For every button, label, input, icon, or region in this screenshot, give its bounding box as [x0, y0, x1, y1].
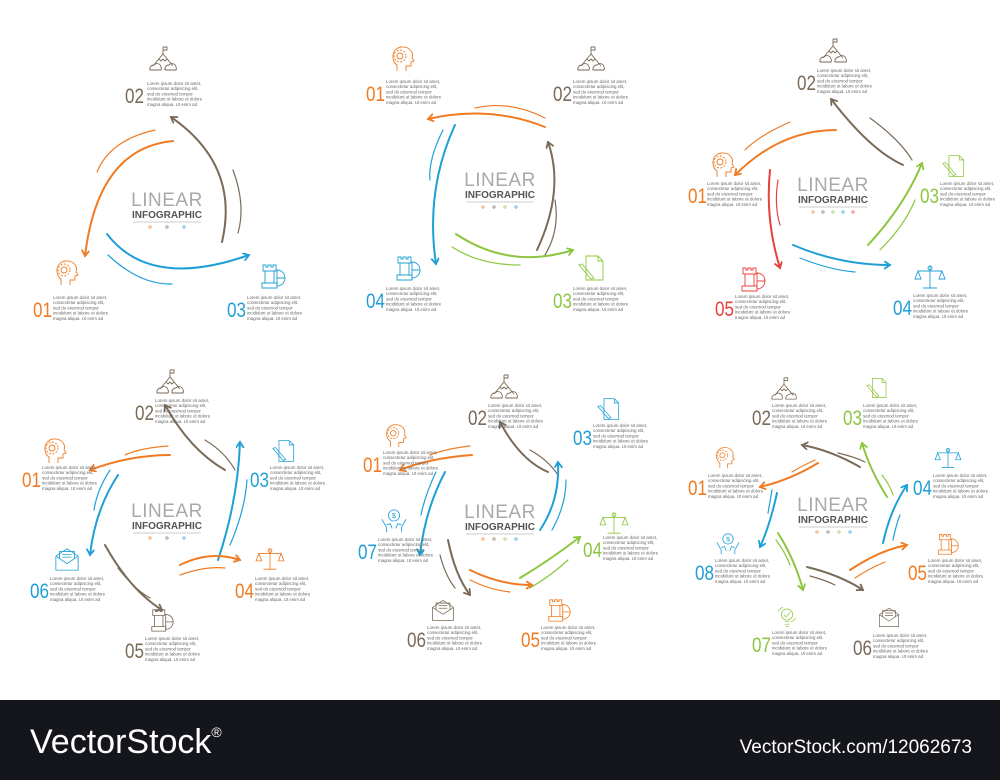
- step 04: 04: [893, 297, 912, 320]
- center title: LINEAR: [131, 190, 203, 211]
- step 04: 04: [913, 477, 932, 500]
- step 07: [752, 607, 828, 657]
- step 04: [235, 549, 311, 603]
- step 04: [913, 449, 989, 500]
- step 03: 03: [843, 407, 862, 430]
- step 04: [893, 266, 969, 320]
- panel: 4 steps: [366, 47, 629, 313]
- step 01: 01: [22, 469, 41, 492]
- center title: [131, 501, 203, 539]
- center title: [797, 175, 869, 213]
- step 06: 06: [30, 580, 49, 603]
- footer bar: [0, 700, 1000, 780]
- center title: LINEAR: [464, 170, 536, 191]
- step 05: 05: [125, 640, 144, 663]
- step 06: [853, 608, 929, 660]
- step 07: 07: [752, 634, 771, 657]
- step 06: [30, 549, 106, 603]
- center title: [131, 190, 203, 228]
- footer logo: VectorStock: [30, 723, 211, 761]
- step 02: 02: [553, 83, 572, 106]
- step 01: [366, 47, 442, 106]
- step 07: [358, 510, 434, 564]
- step 08: [695, 534, 771, 585]
- step 04: 04: [235, 580, 254, 603]
- step 02: [797, 39, 873, 95]
- center title: INFOGRAPHIC: [798, 195, 868, 206]
- step 03: [553, 256, 629, 313]
- step 02: 02: [125, 85, 144, 108]
- step 06: 06: [407, 629, 426, 652]
- step 05: [715, 268, 791, 321]
- step 08: 08: [695, 562, 714, 585]
- step 03: [573, 399, 649, 450]
- step 04: [366, 257, 442, 313]
- step 01: 01: [688, 185, 707, 208]
- step 01: [22, 439, 98, 492]
- step 01: [33, 261, 109, 322]
- step 03: [843, 378, 919, 430]
- center title: [464, 170, 536, 208]
- step 05: [521, 600, 597, 652]
- arrows: 8 steps: [760, 443, 907, 590]
- step 05: [908, 535, 984, 585]
- step 03: [920, 156, 996, 208]
- step 01: 01: [688, 477, 707, 500]
- step 03: [227, 265, 303, 322]
- step 03: 03: [573, 427, 592, 450]
- step 05: 05: [908, 562, 927, 585]
- step 02: [135, 370, 211, 425]
- center title: LINEAR: [131, 501, 203, 522]
- footer url: VectorStock.com/12062673: [740, 737, 972, 758]
- step 02: 02: [135, 402, 154, 425]
- step 01: [688, 447, 764, 500]
- center title: LINEAR: [797, 495, 869, 516]
- center title: INFOGRAPHIC: [132, 521, 202, 532]
- arrows: 6 steps: [90, 405, 247, 610]
- center title: INFOGRAPHIC: [132, 210, 202, 221]
- step 02: [553, 47, 629, 106]
- step 02: 02: [468, 407, 487, 430]
- step 01: 01: [366, 83, 385, 106]
- step 05: [125, 610, 201, 663]
- panel: 5 steps: [688, 39, 996, 321]
- panel: 7 steps: [358, 375, 659, 652]
- arrows: 4 steps: [428, 106, 573, 265]
- step 06: 06: [853, 637, 872, 660]
- step 04: 04: [583, 539, 602, 562]
- step 03: 03: [250, 469, 269, 492]
- step 06: [407, 600, 483, 652]
- step 07: 07: [358, 541, 377, 564]
- step 02: 02: [752, 407, 771, 430]
- step 01: 01: [363, 454, 382, 477]
- panel: 3 steps: [33, 47, 303, 322]
- center title: INFOGRAPHIC: [465, 522, 535, 533]
- step 02: 02: [797, 72, 816, 95]
- step 05: 05: [521, 629, 540, 652]
- step 02: [125, 47, 203, 108]
- step 04: [583, 513, 659, 562]
- footer logo: ®: [211, 724, 222, 740]
- step 03: 03: [553, 290, 572, 313]
- panel: 6 steps: [22, 370, 326, 663]
- panel: 8 steps: [688, 378, 989, 660]
- step 02: [468, 375, 544, 430]
- center title: LINEAR: [464, 502, 536, 523]
- center title: INFOGRAPHIC: [798, 515, 868, 526]
- center title: [464, 502, 536, 540]
- step 01: [363, 425, 439, 477]
- step 02: [752, 378, 828, 430]
- step 01: [688, 153, 763, 208]
- step 04: 04: [366, 290, 385, 313]
- arrows: 5 steps: [735, 99, 922, 272]
- step 03: 03: [920, 185, 939, 208]
- arrows: 7 steps: [400, 422, 580, 595]
- step 03: 03: [227, 299, 246, 322]
- step 03: [250, 441, 326, 492]
- step 05: 05: [715, 298, 734, 321]
- center title: LINEAR: [797, 175, 869, 196]
- step 01: 01: [33, 299, 52, 322]
- arrows: 3 steps: [85, 117, 249, 284]
- center title: INFOGRAPHIC: [465, 190, 535, 201]
- center title: [797, 495, 869, 533]
